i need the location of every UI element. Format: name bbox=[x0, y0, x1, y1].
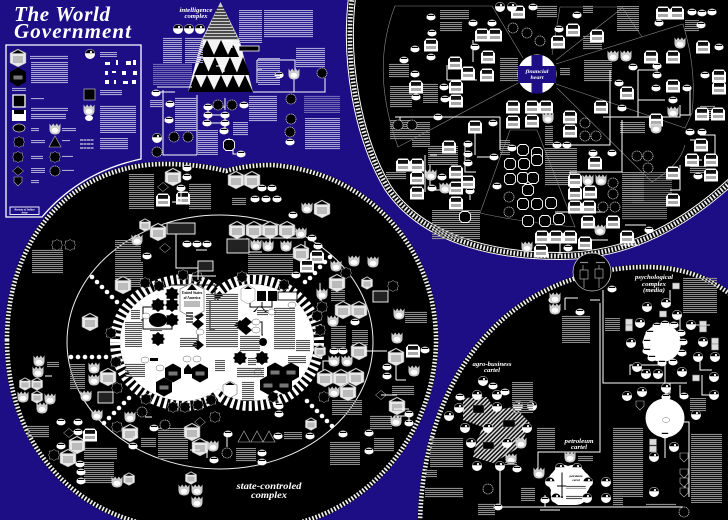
state callout boxes bbox=[98, 223, 388, 403]
state core content bbox=[125, 283, 310, 401]
heading: agro-business cartel: agro-business bbox=[472, 361, 512, 368]
financial heart emblem: heart bbox=[530, 76, 544, 81]
heading: psychological complex bbox=[634, 274, 673, 294]
core label hexagon: United States of America: of America bbox=[184, 296, 201, 300]
state nodes: hexagons bbox=[19, 168, 420, 486]
cartel connectors bbox=[500, 290, 714, 510]
legend note box: Bureau of Indian bbox=[13, 208, 35, 212]
legend note box bbox=[10, 207, 39, 214]
panel: state-controlled complex bbox=[7, 164, 436, 520]
core legend bars bbox=[186, 313, 193, 322]
title: Government bbox=[14, 19, 132, 43]
agro labels bbox=[473, 405, 515, 449]
core connectors bbox=[141, 285, 272, 345]
core text blocks bbox=[125, 293, 310, 401]
core white hexagons bbox=[223, 285, 297, 398]
petroleum white blob: petroleum bbox=[569, 474, 583, 478]
intelligence connectors bbox=[157, 60, 325, 155]
heading: intelligence complex bbox=[180, 7, 213, 20]
state middle ring bbox=[67, 215, 373, 469]
heading: psychological complex: (media) bbox=[643, 287, 665, 294]
core black star nodes bbox=[149, 287, 277, 365]
heading: agro-business cartel bbox=[472, 361, 512, 374]
media oval ring bbox=[455, 286, 689, 510]
state dotted chains bbox=[69, 255, 334, 428]
financial hex boxes bbox=[396, 6, 726, 258]
heading: petroleum cartel bbox=[563, 438, 594, 451]
financial rings bbox=[393, 2, 653, 217]
title: The World bbox=[14, 2, 110, 26]
core label hexagon: United States of America: United States bbox=[182, 291, 203, 295]
state nodes: crowns bbox=[18, 202, 420, 508]
heading: intelligence complex: complex bbox=[184, 13, 208, 20]
state outline bbox=[7, 164, 436, 520]
intelligence text blocks bbox=[150, 10, 340, 155]
connector hub circle bbox=[573, 253, 611, 291]
heading: psychological complex: complex bbox=[642, 281, 667, 288]
cartel crowns and shields bbox=[483, 292, 689, 517]
financial heart emblem: financial bbox=[526, 70, 549, 75]
financial ovals bbox=[399, 4, 724, 251]
state inner white core bbox=[115, 279, 319, 406]
panel: cartels and media bbox=[420, 253, 728, 520]
petroleum white blob: cartel bbox=[572, 478, 580, 482]
legend note box: Army bbox=[20, 212, 28, 214]
intelligence nodes bbox=[151, 24, 327, 157]
legend icons: left column bbox=[10, 49, 26, 186]
core black hexagons bbox=[150, 358, 299, 396]
pyramid bbox=[188, 2, 253, 92]
financial heart emblem bbox=[518, 54, 556, 94]
title bbox=[14, 2, 132, 43]
media white blobs bbox=[643, 324, 684, 438]
legend icons: right column bbox=[80, 49, 137, 148]
pyramid callout box bbox=[239, 46, 259, 51]
state nodes: ovals bbox=[56, 165, 430, 484]
panel: financial heart bbox=[350, 0, 728, 258]
financial black boxes bbox=[460, 144, 564, 226]
state text blocks on black bbox=[27, 174, 427, 484]
petroleum white blob bbox=[548, 465, 591, 505]
agro-business hatched area bbox=[463, 397, 530, 463]
financial text blocks bbox=[386, 5, 715, 240]
financial sector lines bbox=[383, 6, 693, 227]
core label hexagon: United States of America bbox=[180, 283, 204, 318]
media squares bbox=[626, 283, 718, 452]
panel: intelligence complex bbox=[150, 2, 340, 157]
heading: state-controled complex: complex bbox=[251, 490, 288, 500]
state connectors bbox=[45, 188, 409, 458]
panel: legend bbox=[6, 45, 141, 217]
heading: agro-business cartel: cartel bbox=[484, 367, 500, 374]
heading: psychological complex: psychological bbox=[634, 274, 673, 281]
heading: intelligence complex: intelligence bbox=[180, 7, 213, 14]
cartel text blocks bbox=[425, 277, 722, 516]
core outline ovals bbox=[141, 302, 296, 375]
financial connectors bbox=[395, 40, 715, 255]
heading: petroleum cartel: cartel bbox=[571, 444, 587, 451]
heading: petroleum cartel: petroleum bbox=[563, 438, 594, 445]
financial crowns bbox=[426, 38, 686, 252]
financial outline bbox=[350, 0, 728, 256]
legend icons: middle column bbox=[49, 124, 61, 176]
heading: state-controled complex bbox=[235, 481, 302, 500]
state nodes: black hexagons and rings bbox=[48, 182, 398, 460]
media outline bbox=[420, 267, 728, 520]
media moon nodes bbox=[444, 298, 720, 503]
legend text bbox=[12, 52, 136, 184]
heading: state-controled complex: state-controled bbox=[235, 481, 302, 491]
